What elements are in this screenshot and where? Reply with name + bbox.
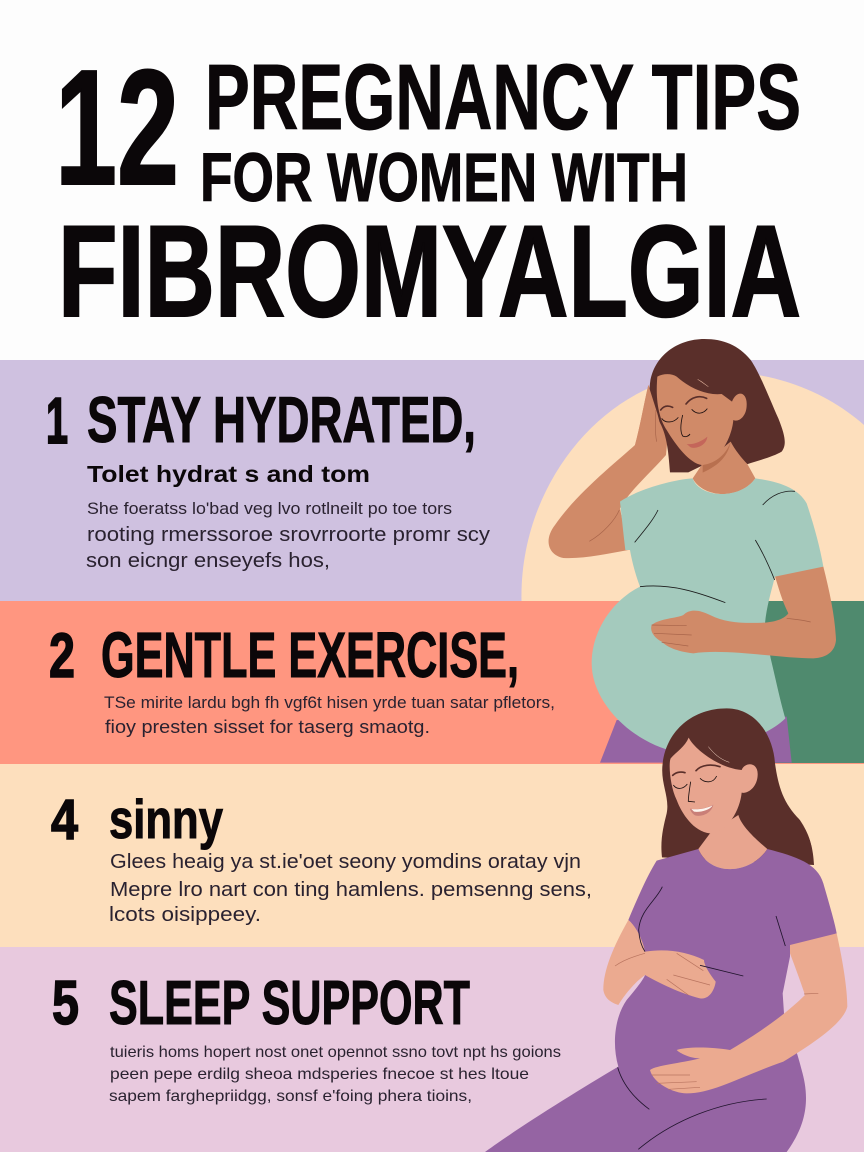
hand on head (635, 385, 666, 455)
illustration: pregnant woman holding head (549, 339, 836, 763)
tip 4 body (109, 851, 592, 926)
fold lines (635, 491, 795, 603)
face lines (673, 776, 717, 802)
tip 5 heading: SLEEP SUPPORT (109, 969, 470, 1038)
tip 1 heading: STAY HYDRATED, (87, 383, 476, 456)
tip 1: stay hydrated (46, 383, 490, 572)
neck (698, 815, 767, 869)
face lines (662, 409, 707, 437)
tip 2 body: fioy presten sisset for taserg smaotg. (105, 717, 430, 737)
face (670, 738, 758, 833)
raised arm (549, 385, 668, 558)
tip 5 body: tuieris homs hopert nost onet opennot ssno tovt npt hs goions (110, 1044, 561, 1061)
tip 4 body: Mepre lro nart con ting hamlens. pemsenng sens, (110, 879, 592, 901)
tip 2 heading: GENTLE EXERCISE, (101, 619, 519, 691)
skirt (600, 717, 792, 763)
decorative green block (765, 601, 864, 763)
hair (650, 339, 785, 472)
smile (690, 805, 713, 816)
panel: sinny band (0, 764, 864, 947)
forearm and hand on belly (651, 567, 836, 658)
shirt and lap (485, 849, 837, 1152)
tip 4 number: 4 (51, 788, 78, 852)
tip 1 body: rooting rmerssoroe srovrroorte promr scy (87, 524, 490, 546)
hair strand (698, 379, 708, 387)
tip 1 body (86, 499, 490, 572)
tip 5 body: peen pepe erdilg sheoa mdsperies fnecoe st hes ltoue (110, 1066, 529, 1083)
tip 2 body (104, 693, 555, 737)
neck (693, 442, 755, 494)
tip 5: sleep support (52, 969, 561, 1105)
tip 4 body: Glees heaig ya st.ie'oet seony yomdins oratay vjn (110, 851, 581, 873)
tip 5 body (109, 1044, 561, 1105)
panel: sleep support band (0, 947, 864, 1152)
neck shadow (703, 442, 731, 473)
panel: stay hydrated band (0, 360, 864, 601)
left arm and hand (603, 920, 716, 1005)
hair (661, 708, 814, 865)
right arm and hand (650, 933, 847, 1093)
decorative peach circle (521, 372, 864, 601)
panel: gentle exercise band (0, 601, 864, 764)
eyebrows (673, 765, 720, 775)
hand lines (589, 410, 811, 646)
tip 2 body: TSe mirite lardu bgh fh vgf6t hisen yrde tuan satar pfletors, (104, 693, 555, 712)
eyebrows (661, 397, 707, 410)
tip 2 number: 2 (49, 621, 75, 691)
title (55, 36, 801, 344)
fold lines (618, 887, 785, 1149)
hair highlight (708, 747, 729, 762)
tip 1 subheading: Tolet hydrat s and tom (87, 461, 370, 487)
title: FOR WOMEN WITH (200, 139, 688, 216)
illustration: pregnant woman seated, cradling belly (485, 708, 847, 1152)
shirt (592, 478, 823, 752)
tip 2: gentle exercise (49, 619, 555, 737)
tip 5 number: 5 (52, 969, 79, 1038)
hand lines (615, 953, 818, 1089)
tip 4: sinny (51, 788, 592, 926)
face (657, 374, 747, 465)
tip 1 number: 1 (46, 384, 68, 457)
tip 4 heading: sinny (109, 788, 223, 850)
title: 12 (55, 36, 179, 219)
tip 1 body: She foeratss lo'bad veg lvo rotlneilt po toe tors (87, 499, 452, 518)
tip 5 body: sapem farghepriidgg, sonsf e'foing phera tioins, (109, 1088, 472, 1105)
tip 4 body: lcots oisippeey. (109, 904, 261, 926)
tip 1 body: son eicngr enseyefs hos, (86, 550, 330, 572)
mouth (687, 437, 707, 448)
